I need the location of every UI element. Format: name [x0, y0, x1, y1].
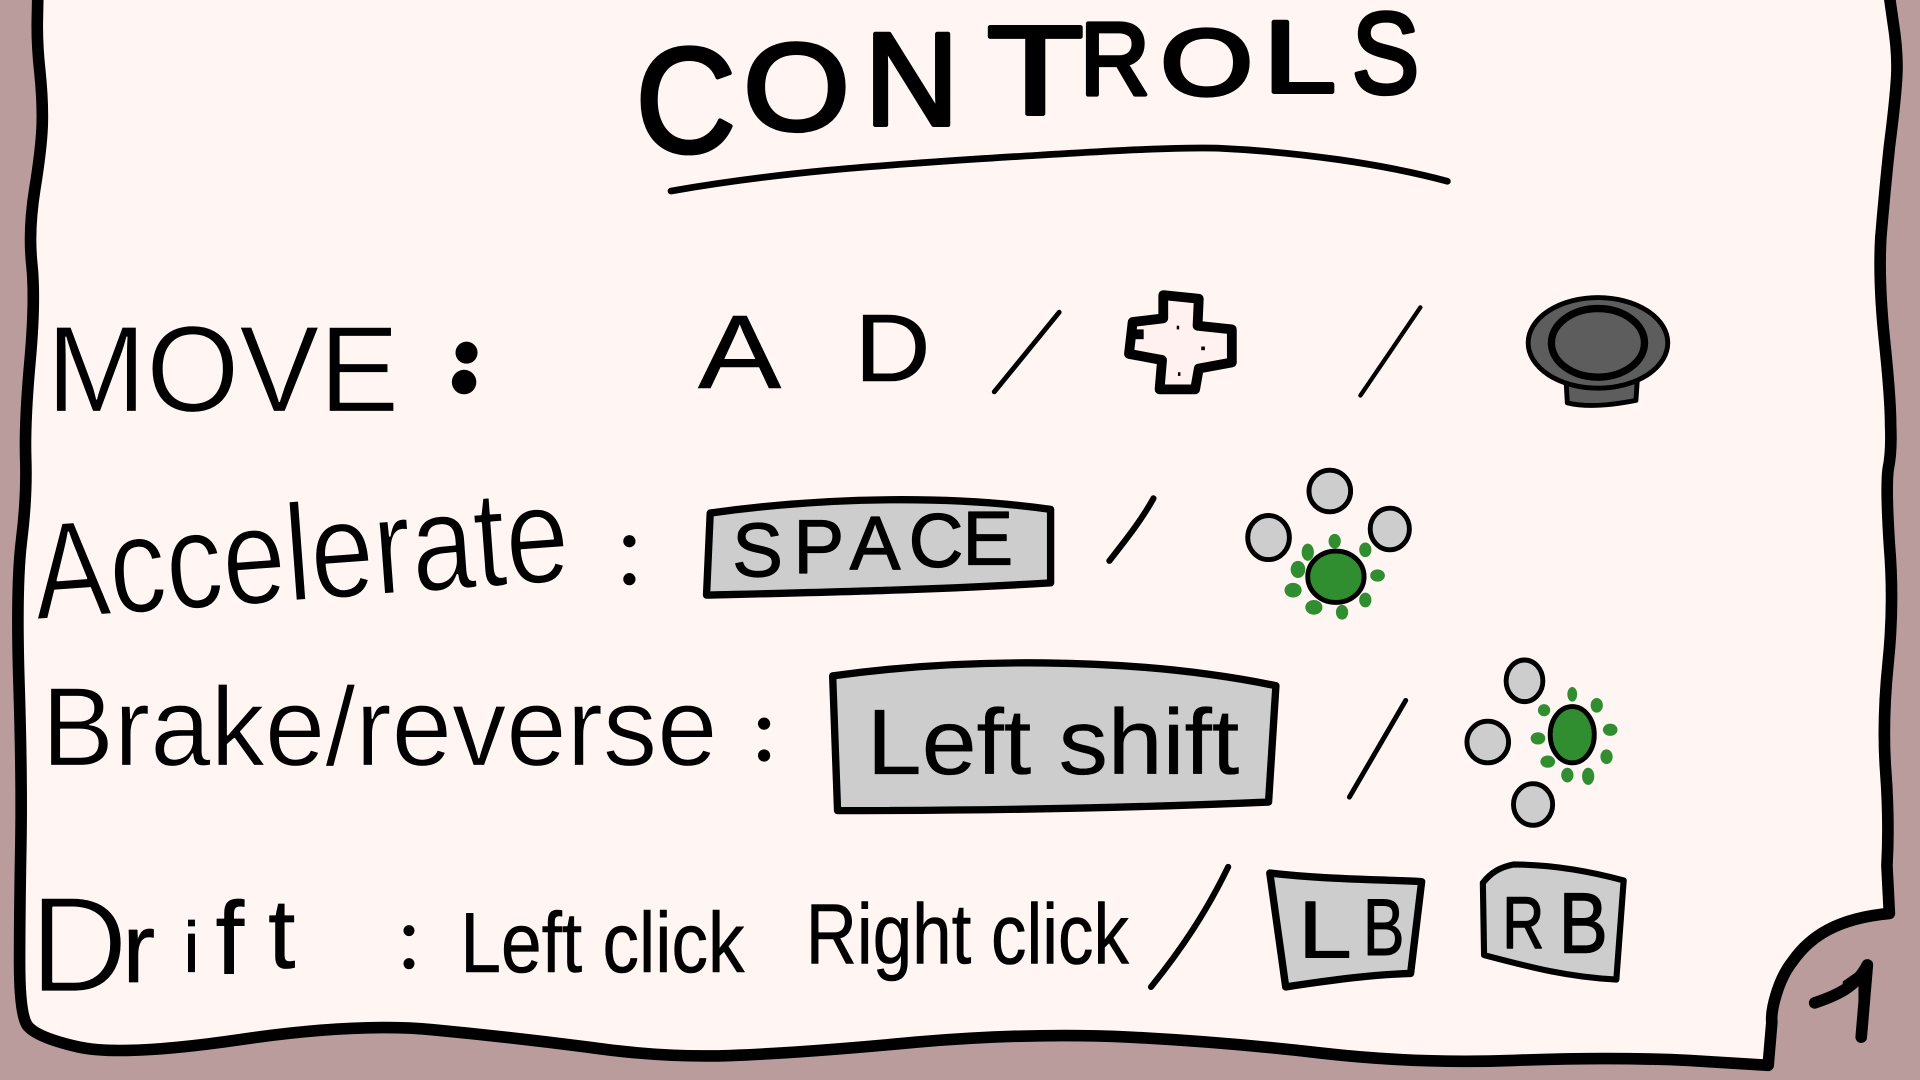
label: accelerate: Accelerate — [28, 458, 574, 650]
icon: gamepad buttons, bottom lit — [1248, 470, 1409, 620]
separator slash — [1151, 867, 1228, 987]
key: RB: R — [1502, 881, 1544, 964]
row: brake / reverse — [42, 660, 1618, 825]
page number: 1 — [1833, 948, 1889, 1063]
icon: gamepad buttons, right lit — [1467, 660, 1618, 825]
label: move: MOVE — [47, 300, 399, 437]
heading underline — [671, 148, 1447, 191]
key: left shift: Left shift — [867, 690, 1239, 794]
key: space: SPACE — [732, 496, 1013, 594]
row: drift — [29, 864, 1624, 1022]
label: drift: i — [184, 909, 199, 988]
label colon: drift — [403, 925, 414, 969]
label: drift: t — [268, 878, 295, 988]
heading: controls: R — [1080, 1, 1150, 116]
icon: d-pad — [1129, 295, 1232, 389]
key: RB: B — [1559, 876, 1608, 972]
icon: analog stick — [1528, 298, 1668, 406]
text: right click: Right click — [806, 887, 1129, 983]
heading: controls: N — [864, 6, 959, 154]
label colon: accelerate — [623, 535, 636, 585]
separator slash — [1109, 498, 1153, 561]
label: drift: D — [29, 869, 128, 1022]
separator slash — [994, 312, 1059, 392]
row: move — [47, 294, 1668, 437]
label: drift: f — [216, 880, 245, 995]
label colon: brake — [758, 718, 770, 762]
row: accelerate — [28, 458, 1409, 650]
key: A: A — [698, 294, 782, 411]
label: brake / reverse: Brake/reverse — [42, 663, 718, 789]
heading: controls: O — [1161, 10, 1253, 114]
heading: controls: T — [987, 0, 1084, 141]
key: LB: B — [1363, 883, 1404, 973]
separator slash — [1349, 700, 1406, 797]
key: left shift — [833, 663, 1276, 811]
label colon: move — [452, 342, 478, 394]
key: RB — [1483, 864, 1624, 980]
key: LB: L — [1298, 886, 1352, 976]
key: LB — [1270, 873, 1422, 987]
label: drift: r — [122, 893, 155, 1003]
heading: controls: O — [743, 19, 850, 157]
text: left click: Left click — [460, 895, 745, 991]
heading: controls: L — [1264, 0, 1336, 114]
key: D: D — [855, 296, 931, 402]
page number — [1808, 959, 1874, 1043]
heading: controls: C — [636, 17, 736, 184]
separator slash — [1360, 307, 1420, 396]
